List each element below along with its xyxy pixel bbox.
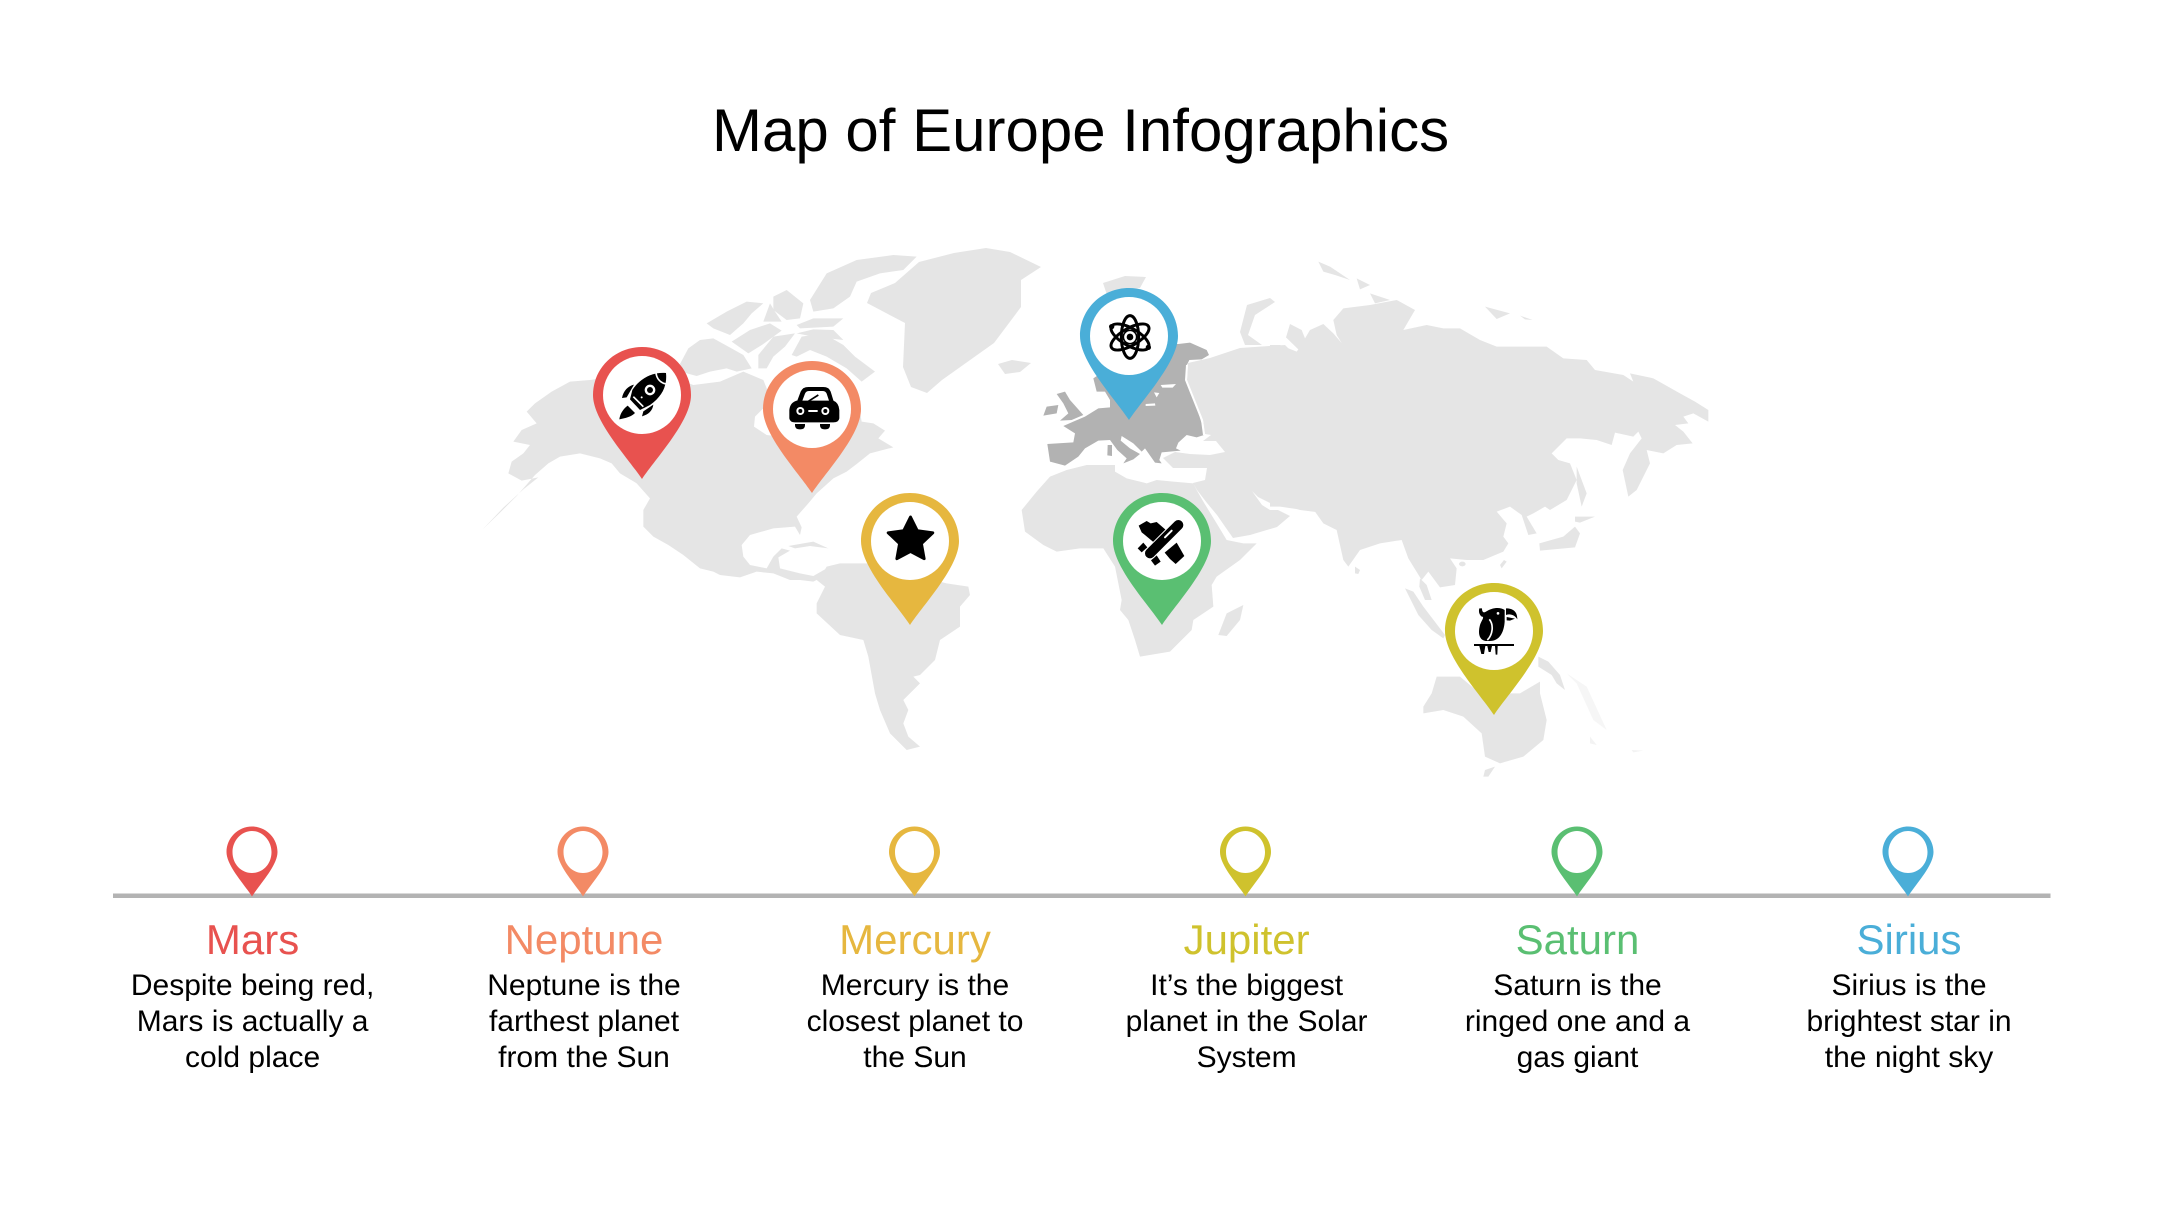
pin: Neptune car [763, 361, 861, 493]
name: Mars: Mars [206, 916, 299, 963]
name: Jupiter: Jupiter [1184, 916, 1310, 963]
small pin: Mercury [889, 826, 940, 896]
landmass: North America [483, 255, 917, 582]
landmass: western Asia [1163, 345, 1340, 538]
pin: Jupiter parrot [1445, 583, 1543, 715]
small pin: Saturn [1552, 826, 1602, 896]
description: Mercury: Mercury is the [821, 969, 1009, 1002]
pin: Saturn plane [1113, 493, 1211, 625]
item: Mars [131, 826, 374, 1074]
description: Neptune: from the Sun [498, 1041, 670, 1074]
icon: star [888, 517, 933, 559]
description: Mars: Mars is actually a [137, 1005, 369, 1038]
pin: Mars rocket [593, 347, 691, 479]
name: Saturn: Saturn [1516, 916, 1639, 963]
landmass: Africa [1022, 465, 1257, 657]
world map [483, 248, 1708, 777]
name: Neptune: Neptune [505, 916, 663, 963]
icon: plane [1138, 521, 1184, 566]
icon: car [789, 387, 839, 429]
description: Neptune: farthest planet [489, 1005, 680, 1038]
timeline line [113, 894, 2050, 898]
item: Sirius [1806, 826, 2012, 1074]
pin: Sirius atom [1080, 288, 1178, 420]
description: Saturn: ringed one and a [1465, 1005, 1690, 1038]
name: Sirius: Sirius [1856, 916, 1962, 963]
item: Saturn [1465, 826, 1690, 1074]
border: Europe and Asia [1186, 365, 1204, 435]
description: Saturn: Saturn is the [1493, 969, 1662, 1002]
icon: rocket [619, 373, 666, 419]
description: Sirius: the night sky [1825, 1041, 1993, 1074]
title: Map of Europe Infographics [712, 97, 1449, 164]
region: Europe highlighted [1043, 343, 1209, 466]
description: Jupiter: It’s the biggest [1150, 969, 1344, 1002]
name: Mercury: Mercury [839, 916, 991, 963]
small pin: Jupiter [1220, 826, 1271, 896]
pin: Mercury star [861, 493, 959, 625]
small pin: Neptune [558, 826, 608, 896]
landmass: Greenland and Iceland [867, 248, 1146, 393]
description: Sirius: brightest star in [1806, 1005, 2012, 1038]
description: Mars: cold place [185, 1041, 320, 1074]
description: Saturn: gas giant [1517, 1041, 1639, 1074]
item: Jupiter [1126, 826, 1368, 1074]
item: Neptune [487, 826, 681, 1074]
small pin: Mars [226, 826, 278, 896]
description: Mercury: closest planet to [807, 1005, 1023, 1038]
icon: atom [1107, 316, 1153, 358]
description: Neptune: Neptune is the [487, 969, 681, 1002]
landmass: South America [817, 563, 970, 750]
landmass: Australia and Indonesia [1405, 588, 1643, 777]
description: Mars: Despite being red, [131, 969, 374, 1002]
small pin: Sirius [1882, 826, 1934, 896]
icon: parrot [1474, 608, 1517, 655]
landmass: northern Arctic island [1240, 298, 1275, 345]
item: Mercury [807, 826, 1023, 1074]
description: Sirius: Sirius is the [1831, 969, 1987, 1002]
description: Mercury: the Sun [863, 1041, 967, 1074]
description: Jupiter: planet in the Solar [1126, 1005, 1368, 1038]
landmass: Russia and eastern Asia [1270, 262, 1708, 600]
description: Jupiter: System [1197, 1041, 1297, 1074]
